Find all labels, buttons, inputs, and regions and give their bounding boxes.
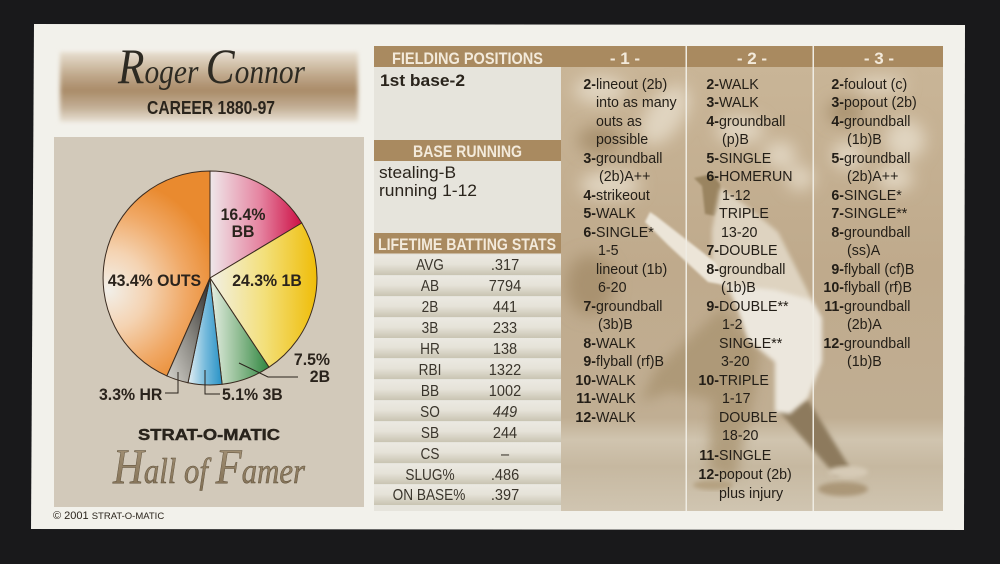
- column 3 results: [823, 77, 917, 370]
- slice: BB: [210, 171, 302, 278]
- column 1 results: 5-: [583, 206, 596, 222]
- heading: column 1: - 1 -: [610, 49, 640, 68]
- column 1 results: 4-: [583, 188, 596, 204]
- shoe shadows: [818, 482, 868, 496]
- column 1 results: flyball (rf)B: [596, 354, 664, 370]
- lifetime batting stats table: SO: [420, 404, 440, 421]
- base running values: running 1-12: [379, 181, 477, 200]
- heading: lifetime batting stats: LIFETIME BATTING STATS: [378, 235, 556, 254]
- column 1 results: SINGLE*: [596, 225, 654, 241]
- column 1 results: 6-20: [598, 280, 626, 296]
- column 1 results: into as many: [596, 95, 677, 111]
- column 3 results: 4-: [831, 114, 844, 130]
- column 3 results: 12-: [823, 336, 844, 352]
- column 2 results: 9-: [706, 299, 719, 315]
- lifetime batting stats table: ON BASE%: [393, 487, 465, 504]
- column 1 results: outs as: [596, 114, 642, 130]
- column 1 results: WALK: [596, 336, 636, 352]
- column 2 results: 13-20: [721, 225, 757, 241]
- column 2 results: HOMERUN: [719, 169, 793, 185]
- front leg: [640, 308, 760, 480]
- lifetime batting stats table: 1002: [489, 383, 521, 400]
- column 3 results: 8-: [831, 225, 844, 241]
- column 2 results: WALK: [719, 77, 759, 93]
- lifetime batting stats table: SLUG%: [405, 467, 455, 484]
- column 3 results: (2b)A++: [847, 169, 898, 185]
- column 1 results: 9-: [583, 354, 596, 370]
- column 2 results: 6-: [706, 169, 719, 185]
- column 1 results: possible: [596, 132, 648, 148]
- lifetime batting stats table: BB: [421, 383, 439, 400]
- base running values: [379, 163, 477, 200]
- pie labels: 7.5%: [294, 351, 330, 369]
- column 2 results: 2-: [706, 77, 719, 93]
- column 1 results: 6-: [583, 225, 596, 241]
- slice: outs: [103, 171, 210, 376]
- shoe: [828, 466, 868, 478]
- column 2 results: 1-2: [722, 317, 743, 333]
- lifetime batting stats table: 244: [493, 425, 517, 442]
- column 3 results: groundball: [844, 225, 910, 241]
- column 2 results: (p)B: [722, 132, 749, 148]
- column 2 results: popout (2b): [719, 467, 792, 483]
- panel: pie chart: [54, 137, 364, 507]
- pie labels: 43.4% OUTS: [108, 272, 201, 290]
- column 2 results: DOUBLE**: [719, 299, 789, 315]
- column 2 results: TRIPLE: [719, 206, 769, 222]
- career years: CAREER 1880-97: [147, 98, 275, 118]
- lifetime batting stats table: AVG: [416, 257, 444, 274]
- column 2 results: SINGLE**: [719, 336, 783, 352]
- column 3 results: (2b)A: [847, 317, 882, 333]
- column 1 results: 11-: [576, 391, 596, 407]
- lifetime batting stats table: HR: [420, 341, 440, 358]
- slice: 2B: [210, 278, 269, 384]
- cap and face: [694, 174, 722, 216]
- column 2 results: 8-: [706, 262, 719, 278]
- lifetime batting stats table: 449: [493, 404, 518, 421]
- column 3 results: 7-: [831, 206, 844, 222]
- column 3 results: 5-: [831, 151, 844, 167]
- column 2 results: (1b)B: [721, 280, 756, 296]
- column 2 results: plus injury: [719, 486, 784, 502]
- fielding position value: 1st base-2: [380, 71, 465, 90]
- column 3 results: flyball (cf)B: [844, 262, 914, 278]
- brand name: STRAT-O-MATIC: [138, 427, 281, 444]
- column 3 results: (ss)A: [847, 243, 880, 259]
- heading: fielding positions: FIELDING POSITIONS: [392, 49, 543, 68]
- column 3 results: 10-: [823, 280, 844, 296]
- lifetime batting stats table: AB: [421, 278, 439, 295]
- back leg: [778, 400, 850, 476]
- column 2 results: DOUBLE: [719, 243, 778, 259]
- column 2 results: 4-: [706, 114, 719, 130]
- column 3 results: SINGLE**: [844, 206, 908, 222]
- hall of famer script: Hall of Famer: [112, 438, 306, 494]
- left column background: [374, 67, 561, 511]
- lifetime batting stats table: 2B: [422, 299, 438, 316]
- column 3 results: 2-: [831, 77, 844, 93]
- pitcher arm: [645, 212, 725, 285]
- lifetime batting stats table: 7794: [489, 278, 521, 295]
- heading: column 3: - 3 -: [864, 49, 894, 68]
- column 2 results: 10-: [698, 373, 719, 389]
- column 1 results: WALK: [596, 206, 636, 222]
- column 3 results: groundball: [844, 299, 910, 315]
- heading: base running: BASE RUNNING: [413, 142, 522, 161]
- column 2 results: TRIPLE: [719, 373, 769, 389]
- lifetime batting stats table: 138: [493, 341, 517, 358]
- column 3 results: groundball: [844, 336, 910, 352]
- column 2 results: 3-20: [721, 354, 749, 370]
- column 1 results: (3b)B: [598, 317, 633, 333]
- pie labels: 24.3% 1B: [232, 272, 302, 290]
- lifetime batting stats table: –: [501, 446, 510, 463]
- lifetime batting stats table: SB: [421, 425, 439, 442]
- lifetime batting stats table: RBI: [419, 362, 441, 379]
- column 3 results: groundball: [844, 151, 910, 167]
- column 3 results: (1b)B: [847, 354, 882, 370]
- pie labels: [99, 206, 330, 404]
- column 2 results: groundball: [719, 114, 785, 130]
- column 3 results: (1b)B: [847, 132, 882, 148]
- lifetime batting stats table: 1322: [489, 362, 521, 379]
- column 3 results: 6-: [831, 188, 844, 204]
- column 2 results: WALK: [719, 95, 759, 111]
- pie labels: 16.4%: [221, 206, 265, 224]
- heading: base running: [374, 140, 561, 161]
- header band: fielding positions and column numbers: [374, 46, 943, 68]
- column 2 results: 18-20: [722, 428, 758, 444]
- column 1 results: [575, 77, 677, 426]
- column 2 results: groundball: [719, 262, 785, 278]
- column 3 results: 9-: [831, 262, 844, 278]
- column 1 results: lineout (2b): [596, 77, 667, 93]
- column 1 results: 2-: [583, 77, 596, 93]
- column 2 results: SINGLE: [719, 151, 771, 167]
- column 2 results: 5-: [706, 151, 719, 167]
- column 2 results: 12-: [698, 467, 719, 483]
- column 1 results: 3-: [583, 151, 596, 167]
- column 3 results: SINGLE*: [844, 188, 902, 204]
- pitcher shirt: [710, 187, 812, 304]
- column 1 results: 7-: [583, 299, 596, 315]
- pie labels: BB: [232, 223, 254, 241]
- column 2 results: 3-: [706, 95, 719, 111]
- slice: 3B: [188, 278, 222, 385]
- pie labels: 3.3% HR: [99, 386, 163, 404]
- column 1 results: lineout (1b): [596, 262, 667, 278]
- pie labels: 5.1% 3B: [222, 386, 283, 404]
- pie chart: [103, 171, 317, 385]
- column 1 results: groundball: [596, 299, 662, 315]
- lifetime batting stats table: .486: [491, 467, 519, 484]
- column 1 results: strikeout: [596, 188, 650, 204]
- column 2 results: [698, 77, 793, 502]
- lifetime batting stats table: 3B: [422, 320, 438, 337]
- photo background: pitcher: [561, 67, 943, 511]
- slice: HR: [167, 278, 210, 383]
- lifetime batting stats table: 233: [493, 320, 517, 337]
- column 1 results: groundball: [596, 151, 662, 167]
- column 3 results: flyball (rf)B: [844, 280, 912, 296]
- lifetime batting stats table: .397: [491, 487, 519, 504]
- lifetime batting stats table: .317: [491, 257, 519, 274]
- pie leader lines: [165, 363, 298, 394]
- column 2 results: 11-: [699, 448, 719, 464]
- column dividers: [686, 46, 814, 511]
- slice: 1B: [210, 223, 317, 367]
- lifetime batting stats table: [374, 255, 561, 505]
- pie labels: 2B: [310, 368, 330, 386]
- player name: Roger Connor: [117, 38, 306, 94]
- column 1 results: WALK: [596, 373, 636, 389]
- column 2 results: SINGLE: [719, 448, 771, 464]
- lifetime batting stats table: CS: [421, 446, 440, 463]
- column 2 results: 7-: [706, 243, 719, 259]
- name banner: [60, 38, 358, 122]
- column 1 results: (2b)A++: [599, 169, 650, 185]
- column 1 results: 12-: [575, 410, 596, 426]
- column 1 results: 1-5: [598, 243, 619, 259]
- column 1 results: 8-: [583, 336, 596, 352]
- pitcher pants: [730, 285, 822, 414]
- column 3 results: 11-: [824, 299, 844, 315]
- column 1 results: 10-: [575, 373, 596, 389]
- column 1 results: WALK: [596, 391, 636, 407]
- column 2 results: DOUBLE: [719, 410, 778, 426]
- copyright: © 2001 STRAT-O-MATIC: [53, 510, 164, 522]
- column 2 results: 1-12: [722, 188, 750, 204]
- column 3 results: 3-: [831, 95, 844, 111]
- column 1 results: WALK: [596, 410, 636, 426]
- column 2 results: 1-17: [722, 391, 750, 407]
- lifetime batting stats table: 441: [493, 299, 517, 316]
- column 3 results: groundball: [844, 114, 910, 130]
- column 3 results: popout (2b): [844, 95, 917, 111]
- column 3 results: foulout (c): [844, 77, 907, 93]
- base running values: stealing-B: [379, 163, 456, 182]
- heading: column 2: - 2 -: [737, 49, 767, 68]
